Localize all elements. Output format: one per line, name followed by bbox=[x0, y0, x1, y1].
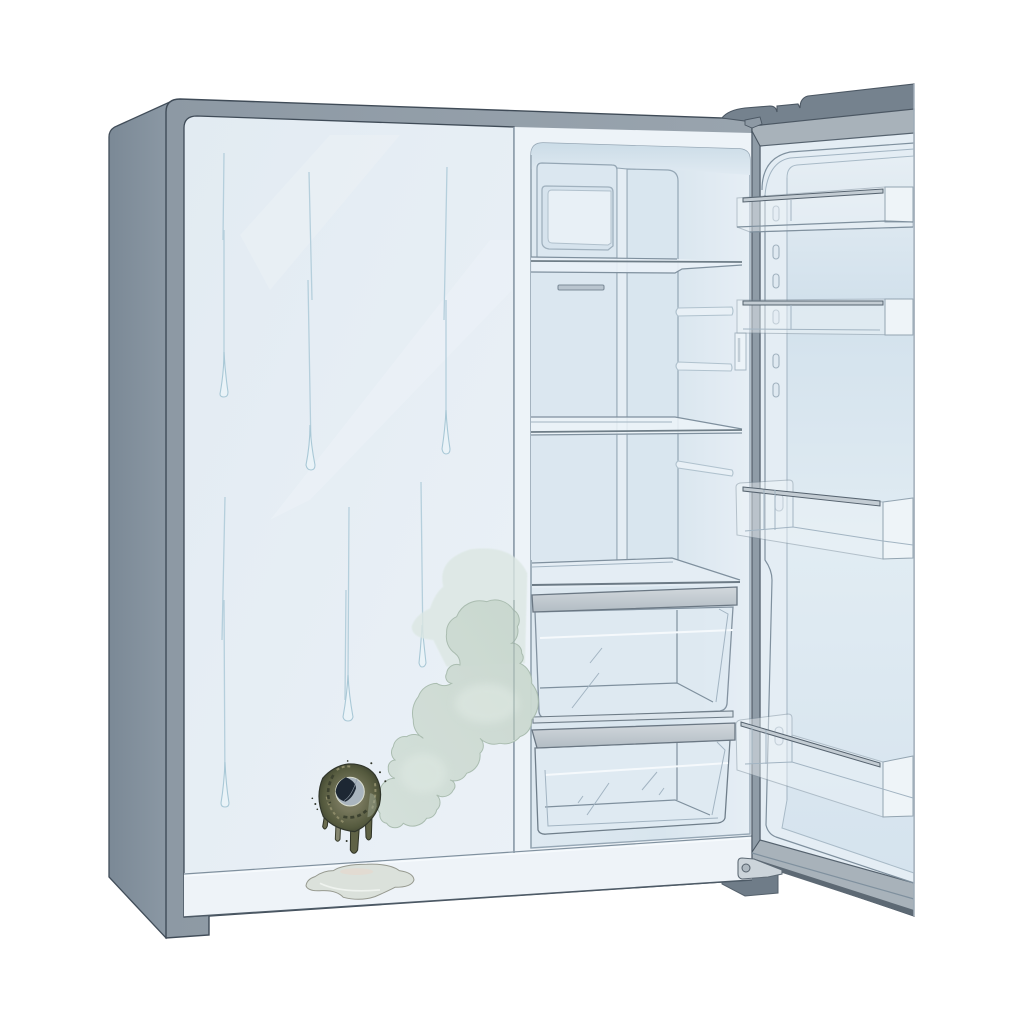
crisper drawer one bbox=[532, 587, 737, 723]
door side column slots bbox=[773, 206, 783, 745]
door frame bbox=[752, 109, 914, 916]
puddle on bottom sill bbox=[306, 864, 414, 899]
crisper cover shelf bbox=[532, 558, 740, 588]
door cut edge bbox=[913, 84, 915, 916]
top hinge bracket bbox=[745, 117, 762, 128]
small tag near door hinge bbox=[735, 333, 746, 370]
bottom sill bbox=[184, 835, 752, 917]
cabinet front frame bbox=[166, 99, 752, 938]
door shelf three bbox=[736, 480, 913, 559]
ice bin box bbox=[542, 186, 613, 250]
bottom door hinge bbox=[738, 858, 782, 879]
door top cap and hinge bbox=[722, 84, 914, 127]
fridge cavity liner bbox=[514, 127, 750, 853]
freezer section liner bbox=[184, 116, 514, 917]
fridge shelf one bbox=[531, 257, 742, 273]
door inner liner bbox=[752, 131, 914, 916]
handle on rear panel bbox=[558, 285, 604, 290]
rear cavity panels bbox=[531, 163, 678, 560]
fridge shelf two bbox=[531, 417, 742, 436]
door shelf four bbox=[736, 714, 913, 817]
rear foot right bbox=[722, 874, 778, 896]
cloud of stale odor bbox=[376, 548, 538, 828]
cabinet left side panel bbox=[109, 101, 172, 938]
door shelf two bbox=[737, 299, 913, 335]
door shelf one bbox=[737, 187, 913, 232]
water streaks and drops on freezer wall bbox=[220, 153, 450, 807]
fridge section surround bbox=[514, 127, 752, 896]
mouldy clogged drain hole bbox=[311, 760, 386, 853]
crisper drawer two bbox=[532, 723, 735, 834]
shelf support pegs bbox=[676, 307, 733, 476]
